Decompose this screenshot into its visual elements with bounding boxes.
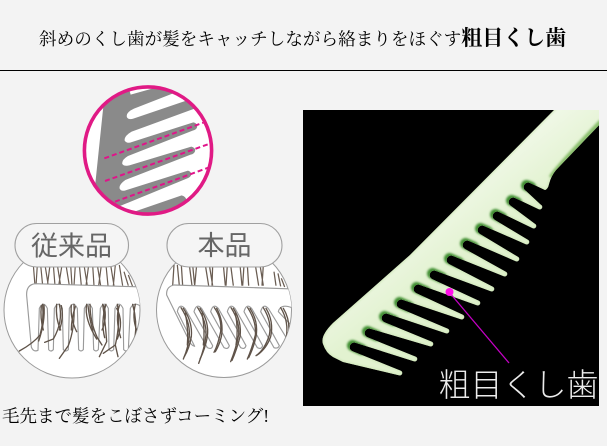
pointer line and dot [446,288,509,363]
comb outline with slanted teeth [167,285,295,348]
tangled hair in gaps [19,304,137,358]
label pill: conventional: 従来品 [31,232,112,262]
hair strands above comb [33,265,133,287]
hair strands above comb [173,265,285,287]
label pill: this product: 本品 [198,231,252,261]
green shading at tooth roots [352,186,530,350]
comb body and teeth [322,104,602,375]
dashed guide lines [104,123,211,202]
label pill: conventional [15,224,128,267]
caption: 毛先まで髪をこぼさずコーミング! [2,406,269,426]
panel: comb photo [303,104,602,406]
title: 斜めのくし歯が髪をキャッチしながら絡まりをほぐす粗目くし歯 [39,26,566,50]
photo label: 粗目くし歯 [438,367,599,403]
comb outline with straight teeth [27,284,143,351]
illustration: conventional comb [4,224,143,378]
illustration: this product comb [156,224,295,378]
icon: magnified comb teeth [83,87,212,220]
handle underside shading [552,122,602,178]
hair through slanted gaps [181,308,289,363]
label pill: this product [167,224,282,267]
soft edge shading [322,104,602,375]
